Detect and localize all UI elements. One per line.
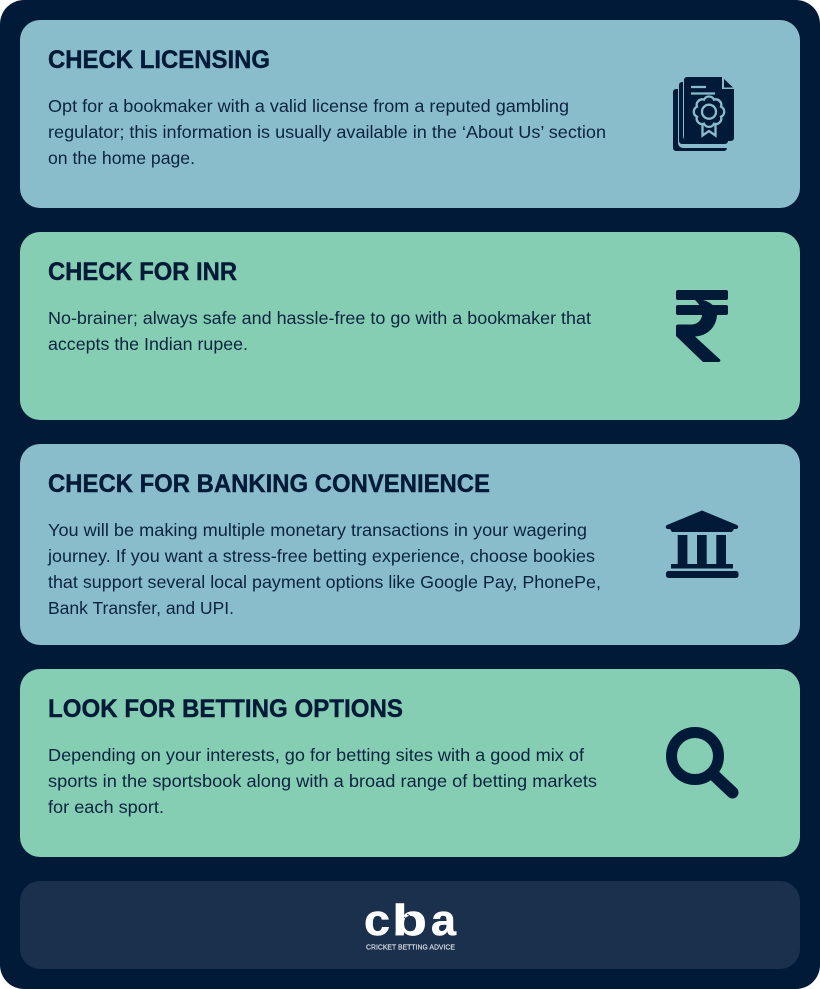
text: licensing description: on the home page. bbox=[48, 148, 195, 168]
panel: check licensing bbox=[20, 20, 800, 208]
icon: bank building bbox=[666, 510, 738, 578]
text: licensing description bbox=[48, 96, 606, 168]
logo: cricket betting advice: CRICKET BETTING ADVICE bbox=[366, 942, 455, 952]
panel: check for INR bbox=[20, 232, 800, 420]
text: banking description: Bank Transfer, and UPI. bbox=[48, 598, 234, 618]
panel: banking convenience bbox=[20, 444, 800, 645]
text: licensing description: regulator; this information is usually available in the ‘About Us’ section bbox=[48, 122, 606, 142]
text: INR description bbox=[48, 308, 591, 354]
heading: banking convenience: CHECK FOR BANKING CONVENIENCE bbox=[48, 470, 490, 498]
text: betting options description bbox=[48, 745, 597, 817]
text: betting options description: Depending on your interests, go for betting sites with a good mix of bbox=[48, 745, 584, 765]
text: banking description: journey. If you want a stress-free betting experience, choose bookies bbox=[47, 546, 595, 566]
icon: magnifying glass bbox=[672, 732, 732, 792]
logo: cricket betting advice bbox=[364, 896, 457, 952]
logo: cricket betting advice: c bbox=[364, 896, 390, 945]
text: INR description: No-brainer; always safe and hassle-free to go with a bookmaker that bbox=[48, 308, 591, 328]
heading: check licensing: CHECK LICENSING bbox=[48, 46, 270, 74]
text: banking description: that support several local payment options like Google Pay, PhonePe, bbox=[48, 572, 601, 592]
text: betting options description: sports in the sportsbook along with a broad range of betting markets bbox=[48, 771, 597, 791]
logo: cricket betting advice: a bbox=[431, 896, 457, 945]
heading: betting options: LOOK FOR BETTING OPTIONS bbox=[48, 695, 403, 723]
panel: betting options bbox=[20, 669, 800, 857]
text: banking description bbox=[47, 520, 601, 618]
icon: rupee symbol bbox=[676, 290, 728, 362]
heading: check for INR: CHECK FOR INR bbox=[48, 258, 237, 286]
text: betting options description: for each sport. bbox=[48, 797, 164, 817]
logo: cricket betting advice: b bbox=[392, 896, 427, 945]
icon: certificate documents bbox=[673, 77, 734, 151]
text: INR description: accepts the Indian rupee. bbox=[48, 334, 248, 354]
text: licensing description: Opt for a bookmaker with a valid license from a reputed gambling bbox=[48, 96, 569, 116]
panel: footer logo bbox=[20, 881, 800, 969]
text: banking description: You will be making multiple monetary transactions in your wagering bbox=[48, 520, 587, 540]
